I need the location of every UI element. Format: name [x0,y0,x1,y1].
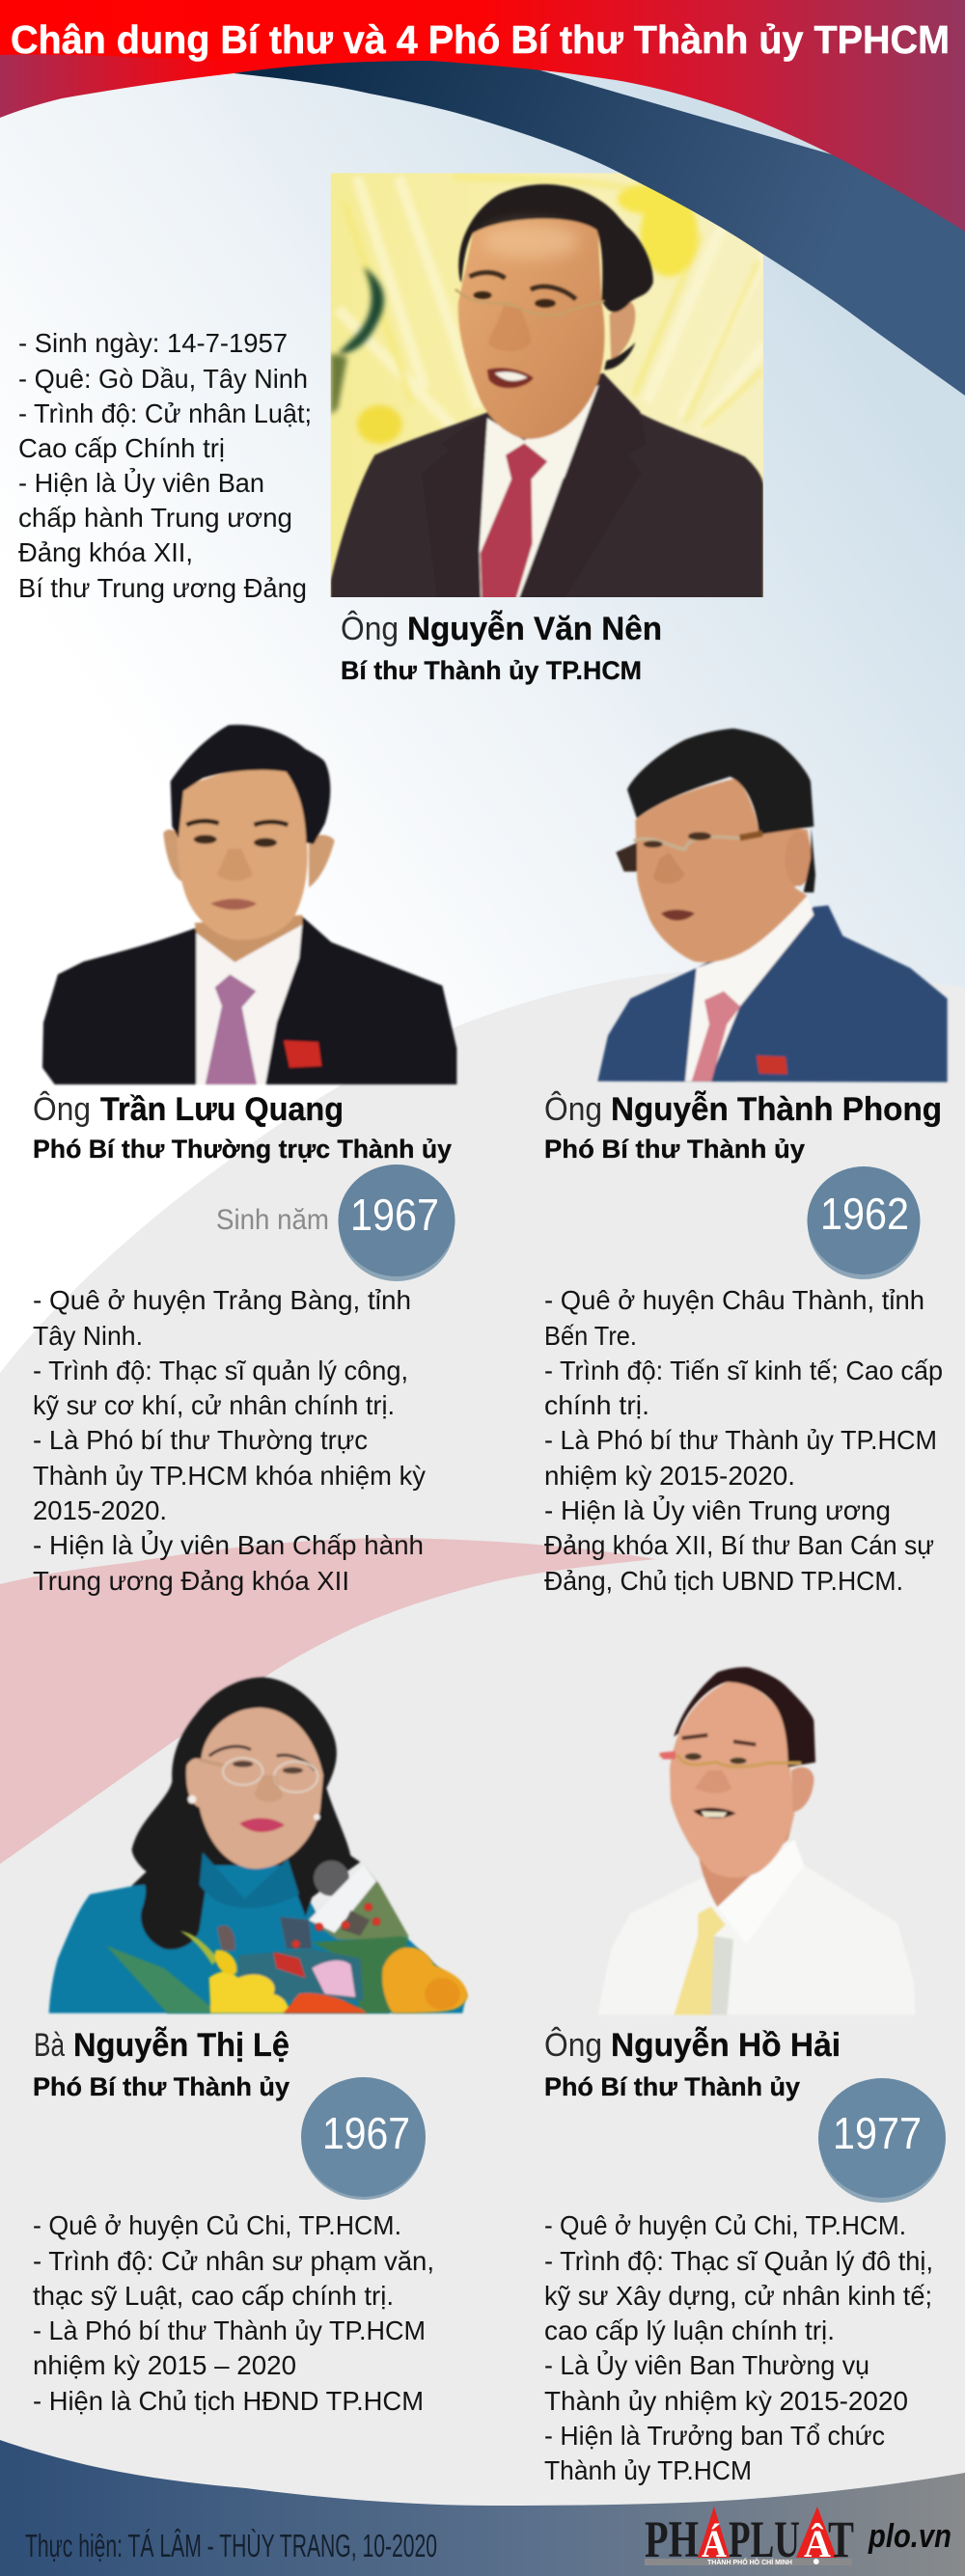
bio: Nguyễn Thị Lệ: thạc sỹ Luật, cao cấp chính trị. [33,2281,394,2311]
logo: Pháp Luật [645,2507,854,2568]
bio: Nguyễn Hồ Hải: Thành ủy TP.HCM [544,2455,752,2485]
bio: Nguyễn Thành Phong: nhiệm kỳ 2015-2020. [544,1461,795,1491]
year badge: 1967 second: 1967 [322,2108,410,2158]
bio: Nguyễn Thị Lệ: - Trình độ: Cử nhân sư phạm văn, [33,2246,434,2276]
footer band [0,2440,965,2576]
year badge: 1962: 1962 [820,1189,909,1239]
bio: Nguyễn Văn Nên: chấp hành Trung ương [18,503,292,533]
logo: Pháp Luật: THÀNH PHỐ HỒ CHÍ MINH [707,2557,792,2566]
bio: Nguyễn Thị Lệ [33,2210,434,2416]
header: top red band [0,0,965,232]
bio: Nguyễn Thành Phong: Đảng, Chủ tịch UBND TP.HCM. [544,1566,903,1596]
bio: Nguyễn Thành Phong [544,1285,943,1596]
logo: Pháp Luật: T [828,2510,854,2568]
bio: Nguyễn Văn Nên: - Sinh ngày: 14-7-1957 [18,328,288,358]
bio: Nguyễn Hồ Hải: cao cấp lý luận chính trị. [544,2316,835,2345]
name: Nguyễn Hồ Hải: Ông [544,2027,602,2064]
name: Nguyễn Thị Lệ: Nguyễn Thị Lệ [73,2027,290,2064]
logo: Pháp Luật: Ậ [804,2522,831,2565]
bio: Trần Lưu Quang [33,1285,426,1596]
year badge: 1977: 1977 [833,2108,922,2158]
bio: Trần Lưu Quang: - Quê ở huyện Trảng Bàng, tỉnh [33,1285,411,1315]
bio: Nguyễn Văn Nên [18,328,312,603]
bio: Nguyễn Văn Nên: Cao cấp Chính trị [18,433,225,463]
year badge: 1967 second [301,2077,426,2200]
bio: Nguyễn Hồ Hải: - Trình độ: Thạc sĩ Quản lý đô thị, [544,2246,933,2276]
bio: Nguyễn Hồ Hải [544,2210,933,2485]
bio: Nguyễn Thành Phong: Bến Tre. [544,1321,637,1351]
bio: Nguyễn Thị Lệ: - Hiện là Chủ tịch HĐND TP.HCM [33,2386,424,2416]
portrait: Nguyễn Hồ Hải [597,1667,915,2014]
bio: Nguyễn Thành Phong: - Trình độ: Tiến sĩ kinh tế; Cao cấp [544,1356,943,1385]
bio: Nguyễn Thành Phong: - Quê ở huyện Châu Thành, tỉnh [544,1285,924,1315]
name: Nguyễn Thành Phong: Phó Bí thư Thành ủy [544,1135,805,1164]
header: navy swoosh [234,39,965,396]
bio: Nguyễn Văn Nên: Đảng khóa XII, [18,537,193,567]
name: Trần Lưu Quang [33,1091,452,1164]
year badge: 1962 [807,1166,921,1279]
bio: Nguyễn Thành Phong: chính trị. [544,1390,649,1420]
logo: Pháp Luật: Á [702,2522,727,2565]
bio: Trần Lưu Quang: Trung ương Đảng khóa XII [33,1566,349,1596]
name: Nguyễn Thị Lệ [33,2027,290,2101]
name: Nguyễn Thị Lệ: Phó Bí thư Thành ủy [33,2072,290,2101]
bio: Nguyễn Thị Lệ: nhiệm kỳ 2015 – 2020 [33,2350,296,2380]
name: Nguyễn Thành Phong: Ông [544,1091,602,1128]
name: Nguyễn Văn Nên: Bí thư Thành ủy TP.HCM [341,656,642,685]
bio: Trần Lưu Quang: kỹ sư cơ khí, cử nhân chính trị. [33,1390,395,1420]
name: Nguyễn Thành Phong: Nguyễn Thành Phong [611,1091,942,1128]
bio: Nguyễn Văn Nên: - Trình độ: Cử nhân Luật; [18,398,312,428]
name: Trần Lưu Quang: Trần Lưu Quang [100,1091,344,1128]
name: Nguyễn Thị Lệ: Bà [34,2027,65,2064]
name: Nguyễn Hồ Hải [544,2027,841,2101]
name: Nguyễn Hồ Hải: Phó Bí thư Thành ủy [544,2072,800,2101]
bio: Trần Lưu Quang: 2015-2020. [33,1495,167,1525]
bio: Trần Lưu Quang: Tây Ninh. [33,1321,143,1351]
bio: Nguyễn Hồ Hải: kỹ sư Xây dựng, cử nhân kinh tế; [544,2281,932,2311]
header: lower left crimson band [0,48,430,118]
bio: Nguyễn Hồ Hải: - Quê ở huyện Củ Chi, TP.HCM. [544,2210,906,2240]
born label: Sinh năm [216,1204,329,1236]
bio: Nguyễn Hồ Hải: - Là Ủy viên Ban Thường vụ [544,2349,869,2380]
bio: Nguyễn Hồ Hải: Thành ủy nhiệm kỳ 2015-2020 [544,2386,908,2416]
background: pink swoosh [0,1538,656,1864]
name: Nguyễn Thành Phong [544,1091,942,1164]
name: Trần Lưu Quang: Ông [33,1091,91,1128]
bio: Nguyễn Thành Phong: - Là Phó bí thư Thành ủy TP.HCM [544,1425,937,1455]
name: Trần Lưu Quang: Phó Bí thư Thường trực Thành ủy [33,1135,452,1164]
portrait: Nguyễn Thành Phong [597,728,948,1082]
bio: Nguyễn Thành Phong: Đảng khóa XII, Bí thư Ban Cán sự [544,1530,934,1560]
name: Nguyễn Văn Nên: Ông [341,611,399,647]
bio: Nguyễn Thành Phong: - Hiện là Ủy viên Trung ương [544,1494,891,1525]
portrait: Trần Lưu Quang [42,725,456,1084]
portrait: Nguyễn Văn Nên [331,173,765,601]
header shapes [0,0,965,396]
year badge: 1967 [338,1165,455,1281]
bio: Trần Lưu Quang: - Hiện là Ủy viên Ban Chấp hành [33,1529,424,1560]
bio: Trần Lưu Quang: - Là Phó bí thư Thường trực [33,1425,368,1455]
credit: Thực hiện: TÁ LÂM - THÙY TRANG, 10-2020 [25,2528,437,2563]
bio: Nguyễn Hồ Hải: - Hiện là Trưởng ban Tổ chức [544,2421,885,2451]
title: Chân dung Bí thư và 4 Phó Bí thư Thành ủy TPHCM [11,17,950,62]
bio: Nguyễn Văn Nên: - Quê: Gò Dầu, Tây Ninh [18,364,308,394]
bio: Nguyễn Văn Nên: - Hiện là Ủy viên Ban [18,467,264,498]
background: light gray curved panel [0,971,965,2576]
name: Nguyễn Văn Nên [341,611,662,685]
logo: Pháp Luật: PH [645,2510,699,2568]
logo: Pháp Luật: PLU [729,2510,800,2568]
bio: Nguyễn Thị Lệ: - Quê ở huyện Củ Chi, TP.HCM. [33,2210,401,2240]
name: Nguyễn Văn Nên: Nguyễn Văn Nên [407,611,662,647]
bio: Nguyễn Thị Lệ: - Là Phó bí thư Thành ủy TP.HCM [33,2316,426,2345]
name: Nguyễn Hồ Hải: Nguyễn Hồ Hải [611,2027,841,2064]
logo: plo.vn: plo.vn [868,2518,951,2555]
bio: Nguyễn Văn Nên: Bí thư Trung ương Đảng [18,573,307,603]
bio: Trần Lưu Quang: - Trình độ: Thạc sĩ quản lý công, [33,1356,408,1385]
portrait: Nguyễn Thị Lệ [49,1677,468,2014]
year badge: 1967: 1967 [350,1190,439,1240]
bio: Trần Lưu Quang: Thành ủy TP.HCM khóa nhiệm kỳ [33,1461,426,1491]
year badge: 1977 [818,2078,946,2203]
